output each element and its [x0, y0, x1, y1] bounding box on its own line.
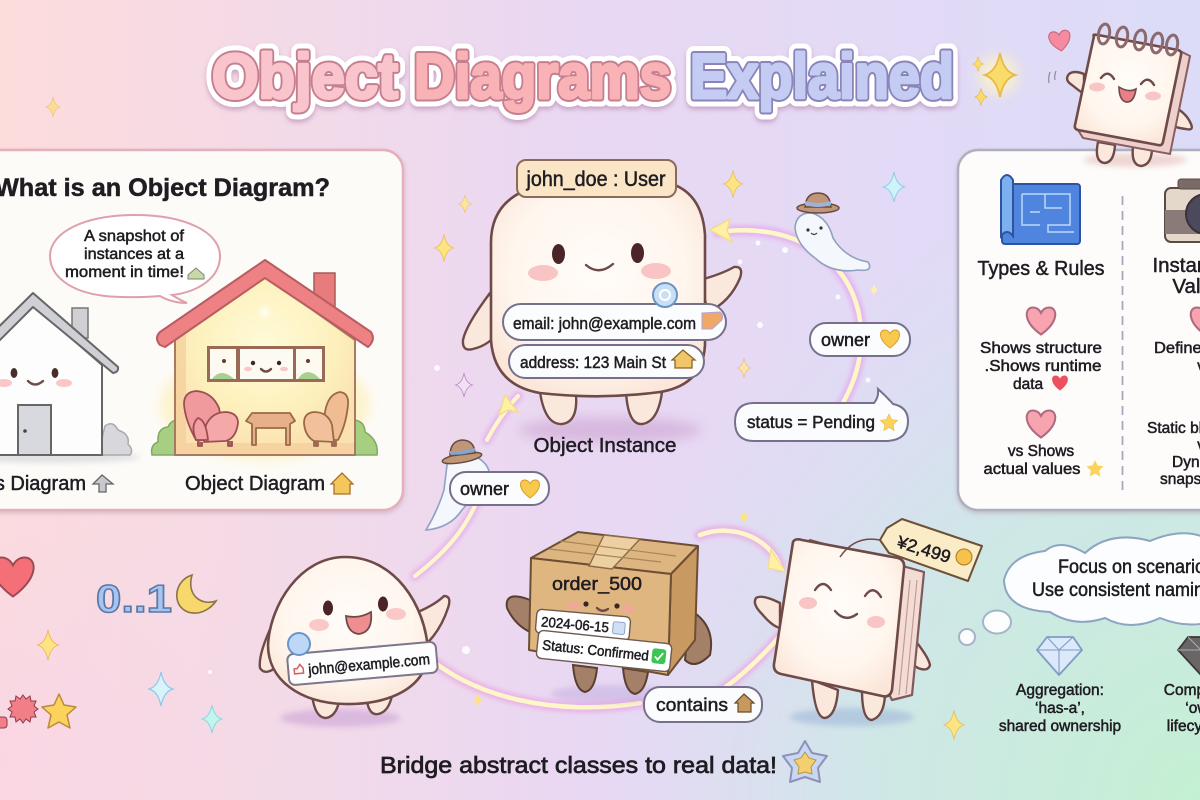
arrow: contains links [418, 531, 786, 708]
divider [1122, 196, 1124, 490]
icon: heart [1191, 308, 1200, 334]
label: object instance: Object Instance [534, 434, 676, 457]
icon: heart [1027, 410, 1055, 438]
title: Explained [690, 42, 954, 112]
text: aggregation: shared ownership [999, 718, 1121, 735]
title [212, 42, 954, 112]
thought cloud [1004, 533, 1200, 625]
title: Explained [690, 42, 954, 112]
pill: contains [644, 687, 762, 722]
text: actual values: vs Shows [1008, 443, 1074, 460]
arrow: owner link to object instance [710, 219, 861, 420]
pill: status confirmed [536, 630, 672, 672]
icon: floating heart [1048, 30, 1072, 52]
title: Object [212, 42, 398, 112]
title: Diagrams [414, 42, 671, 112]
text: bottom takeaway: Bridge abstract classes to real data! [380, 752, 777, 778]
title: Object [212, 42, 398, 112]
icon: table [246, 413, 295, 445]
text: structure: data [1013, 376, 1044, 393]
pill: owner left [450, 472, 549, 505]
pill: email [503, 283, 726, 340]
text: actual values: actual values [984, 461, 1081, 478]
title: Diagrams [414, 42, 671, 112]
icon: title sparkles [973, 53, 1018, 106]
label: object diagram: Object Diagram [185, 472, 325, 495]
character: john_doe object instance [463, 160, 741, 443]
title: Explained [690, 42, 954, 112]
text: aggregation [999, 682, 1121, 735]
icon: composition diamond [1178, 637, 1200, 675]
icon: blueprint [1001, 175, 1080, 244]
text: defines [1154, 340, 1200, 375]
text: structure [980, 340, 1102, 393]
icon: heart [1027, 308, 1055, 334]
pill: date [535, 609, 631, 641]
speech bubble: A snapshot of [84, 228, 185, 245]
pill: owner right: owner [821, 330, 870, 350]
pill: date: 2024-06-15 [540, 613, 610, 635]
pill: status confirmed: Status: Confirmed [542, 637, 650, 664]
panel: comparison [958, 150, 1200, 510]
pill: status pending: status = Pending [747, 412, 875, 432]
heading: instances and values [1152, 254, 1200, 298]
character: lower ghost with hat [426, 440, 490, 530]
speech bubble: instances at a [84, 246, 184, 263]
icon: red heart [0, 558, 34, 596]
tag: price [840, 519, 982, 581]
arrow: lower owner link [415, 395, 518, 576]
house: class diagram [0, 293, 140, 463]
text: composition [1164, 682, 1200, 735]
sparkle dots along arcs [208, 240, 870, 674]
icon: aggregation diamond [1037, 637, 1082, 675]
heading: What is an Object Diagram? [0, 174, 330, 202]
house: object diagram [152, 260, 377, 460]
cloud puff small [959, 629, 975, 645]
pill: status pending [735, 389, 908, 441]
heading: types and rules: Types & Rules [978, 257, 1104, 280]
text: structure: Shows structure [980, 340, 1102, 357]
text: aggregation: Aggregation: [1016, 682, 1104, 699]
title: Object [212, 42, 398, 112]
text: aggregation: ‘has-a’, [1035, 700, 1085, 717]
multiplicity label: 0..1 [96, 578, 172, 621]
character: round user blob [260, 557, 449, 727]
pill: owner right [810, 323, 910, 356]
tag: john_doe : User [517, 160, 676, 197]
pill: contains: contains [656, 694, 728, 715]
pill: john@example.com: john@example.com [307, 651, 431, 679]
character: order_500 box: order_500 [552, 573, 642, 595]
mascot: notebook [1049, 23, 1192, 167]
multiplicity label [96, 575, 216, 621]
text: structure: .Shows runtime [984, 358, 1102, 375]
text: static vs dynamic [1147, 420, 1200, 488]
icon: camera [1165, 179, 1200, 242]
icon: tan armchair [304, 392, 348, 446]
pill: john@example.com [287, 642, 438, 685]
character: product paper [755, 519, 982, 726]
icon: trophy star [783, 741, 827, 782]
speech bubble [50, 215, 220, 303]
speech bubble: moment in time! [65, 264, 184, 281]
pill: address [509, 345, 704, 378]
character: order_500 box [507, 532, 711, 703]
pill: owner left: owner [460, 479, 509, 499]
tag: john_doe : User: john_doe : User [526, 168, 666, 191]
decorative icons: stars and sparkles [0, 97, 964, 740]
panel: what is an object diagram [0, 150, 403, 510]
icon: pink armchair [184, 391, 238, 446]
pill: email: email: john@example.com [513, 315, 696, 333]
character: upper ghost with hat [795, 193, 870, 271]
icon: crescent moon [177, 575, 216, 613]
title: Diagrams [414, 42, 671, 112]
tag: price: ¥2,499 [894, 531, 953, 567]
cloud puff large [983, 610, 1011, 634]
text: actual values [984, 443, 1104, 478]
pill: address: address: 123 Main St [520, 354, 666, 372]
